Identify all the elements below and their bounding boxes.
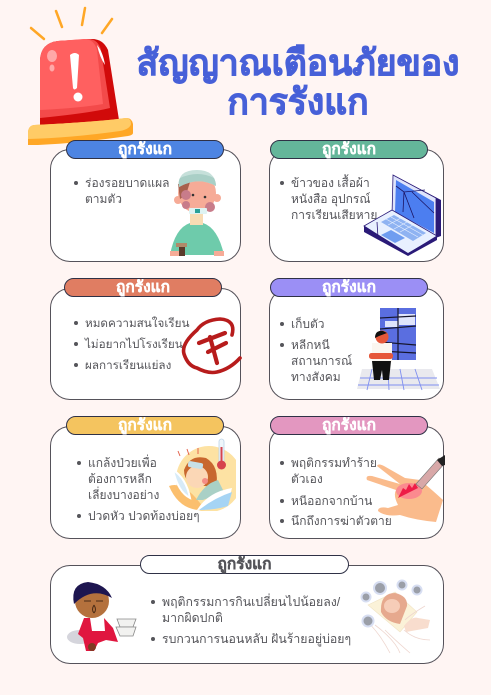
icon: broken laptop (363, 174, 441, 256)
list: injuries: ตามตัว (85, 192, 122, 206)
list: belongings: ข้าวของ เสื้อผ้า (291, 176, 370, 190)
list: school: ผลการเรียนแย่ลง (85, 358, 171, 372)
pill heading: yellow: ถูกรังแก (118, 417, 172, 434)
pill heading: blue: ถูกรังแก (118, 141, 172, 158)
icon: boy overeating (67, 582, 136, 651)
icon: injured boy (170, 170, 224, 256)
list: self-harm: นึกถึงการฆ่าตัวตาย (291, 514, 392, 528)
list: eating and sleep: มากผิดปกติ (162, 611, 223, 625)
panel: injuries (50, 149, 241, 262)
list: self-harm (280, 456, 392, 528)
list: belongings (280, 174, 377, 222)
panel: school (50, 288, 241, 400)
list: illness: เลี่ยงบางอย่าง (88, 488, 159, 502)
list: injuries: ร่องรอยบาดแผล (85, 176, 169, 190)
list: illness: ต้องการหลีก (88, 472, 152, 486)
panel: belongings (269, 149, 444, 262)
list: belongings: หนังสือ อุปกรณ์ (291, 192, 371, 206)
list: eating and sleep (151, 593, 351, 646)
pill heading: yellow (66, 416, 224, 435)
pill heading: green (270, 140, 428, 159)
icon: red alarm siren (28, 6, 133, 145)
list: withdrawal: สถานการณ์ (291, 354, 352, 368)
panel: eating and sleep (50, 565, 444, 664)
pill heading: green: ถูกรังแก (322, 141, 376, 158)
list: eating and sleep: พฤติกรรมการกินเปลี่ยนไปน้อยลง/ (162, 595, 340, 609)
icon: F grade (182, 317, 242, 374)
list: eating and sleep: รบกวนการนอนหลับ ฝันร้ายอยู่บ่อยๆ (162, 632, 351, 646)
list: school: หมดความสนใจเรียน (85, 316, 189, 330)
pill heading: pink: ถูกรังแก (322, 417, 376, 434)
pill heading: pink (270, 416, 428, 435)
list: self-harm: หนีออกจากบ้าน (291, 494, 372, 508)
icon: girl with nightmares (360, 580, 430, 654)
list: school: ไม่อยากไปโรงเรียน (85, 338, 183, 350)
list: withdrawal (280, 316, 352, 384)
list: injuries (74, 176, 169, 206)
list: self-harm: ตัวเอง (291, 472, 323, 486)
pill heading: blue (66, 140, 224, 159)
list: illness: ปวดหัว ปวดท้องบ่อยๆ (88, 509, 200, 523)
list: withdrawal: เก็บตัว (291, 317, 325, 331)
list: illness (77, 454, 200, 523)
pill heading: purple (270, 278, 428, 297)
icon: sick girl with thermometer (169, 438, 236, 511)
panel: illness (50, 426, 241, 539)
icon: lonely person at window (357, 308, 440, 390)
pill heading: coral: ถูกรังแก (116, 279, 170, 296)
pill heading: white: ถูกรังแก (217, 556, 272, 573)
pill heading: coral (64, 278, 222, 297)
list: withdrawal: หลีกหนี (291, 338, 330, 352)
icon: injured wrist with cutter (366, 455, 445, 522)
title (137, 43, 459, 122)
pill heading: purple: ถูกรังแก (322, 279, 376, 296)
pill heading: white (140, 555, 349, 574)
list: school (74, 316, 190, 372)
title: สัญญาณเตือนภัยของ (137, 43, 459, 83)
list: self-harm: พฤติกรรมทำร้าย (291, 456, 377, 470)
list: belongings: การเรียนเสียหาย (291, 208, 377, 222)
list: illness: แกล้งป่วยเพื่อ (88, 456, 157, 470)
title: การรังแก (227, 82, 369, 122)
panel: withdrawal (269, 288, 444, 400)
list: withdrawal: ทางสังคม (291, 370, 341, 384)
panel: self-harm (269, 426, 444, 539)
